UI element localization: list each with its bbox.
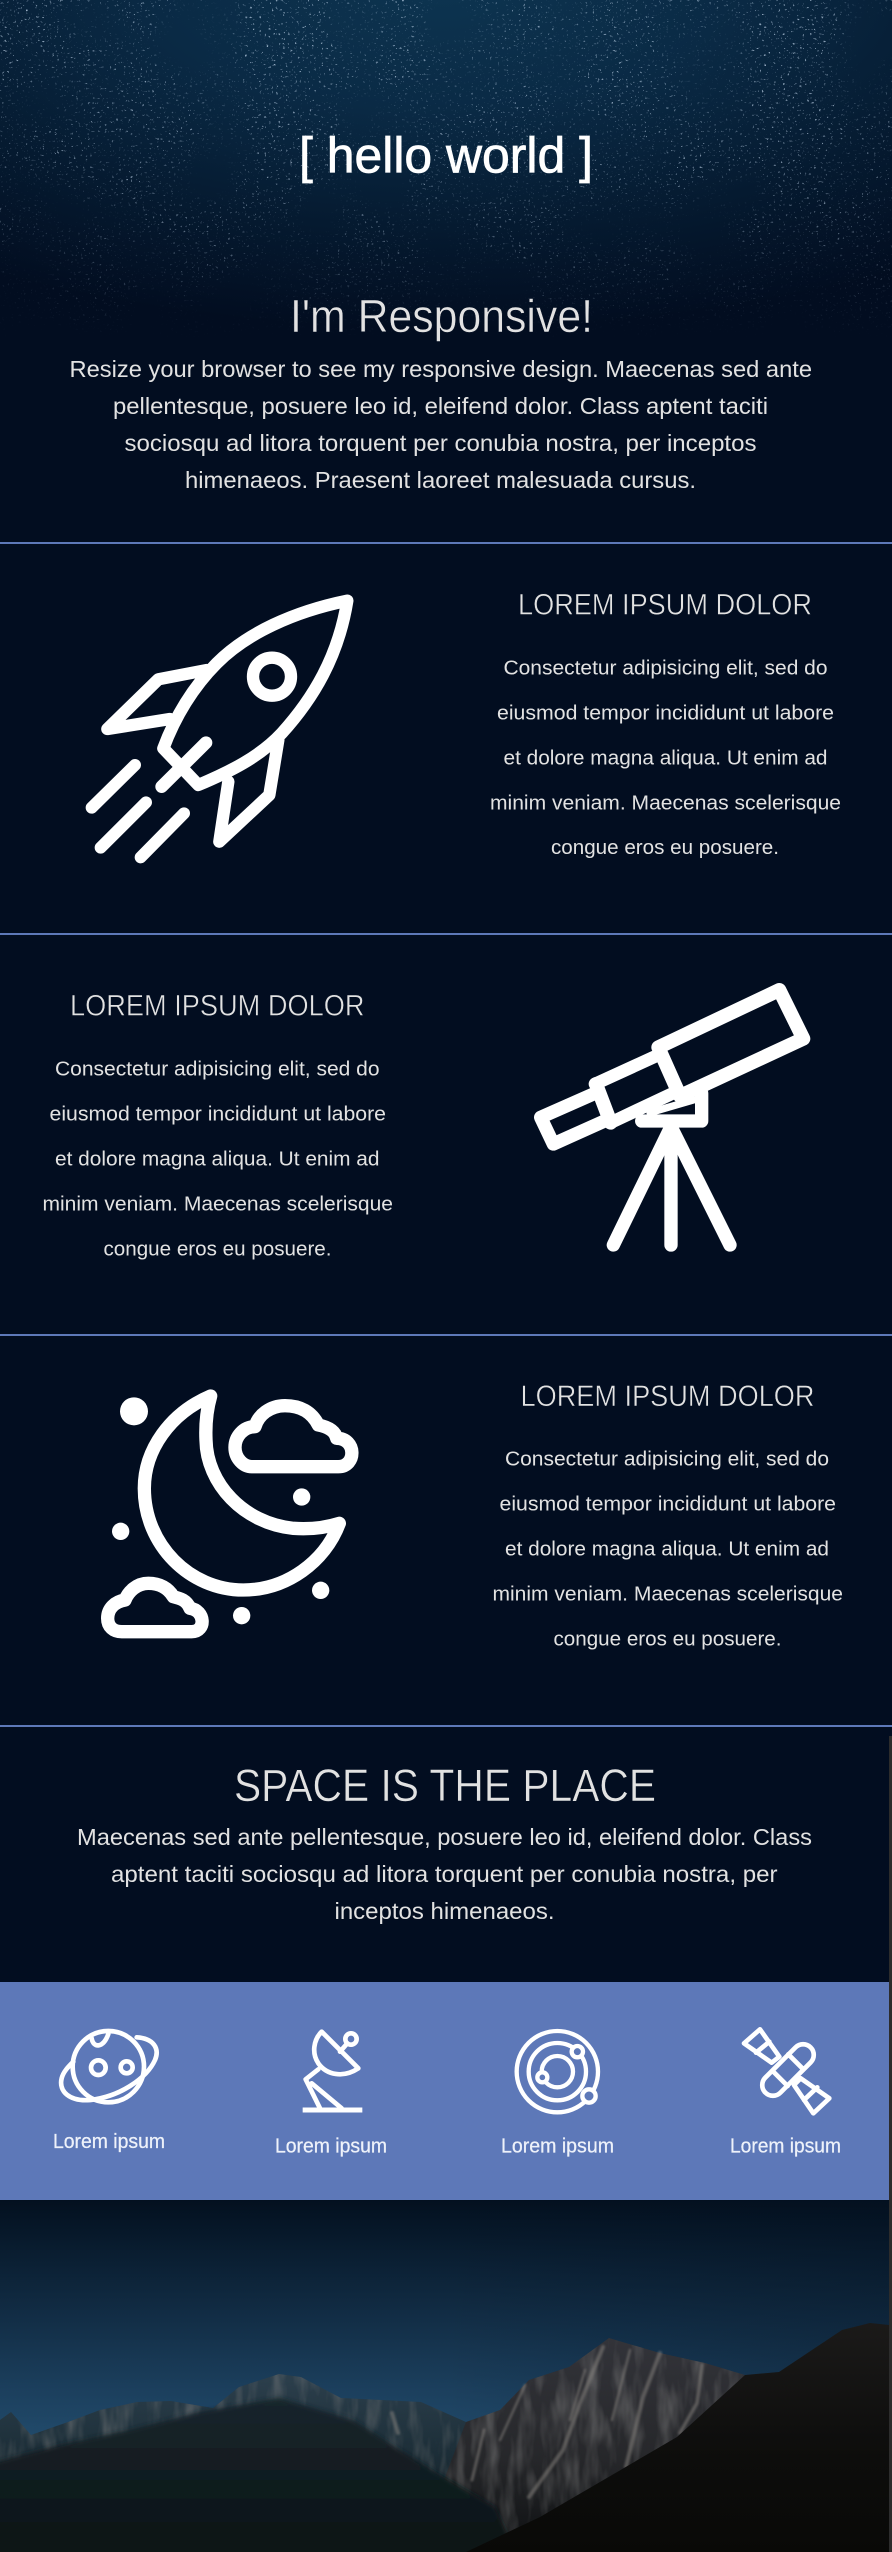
heading: LOREM IPSUM DOLOR (518, 588, 812, 622)
body text: et dolore magna aliqua. Ut enim ad (504, 748, 828, 770)
heading: LOREM IPSUM DOLOR (70, 990, 364, 1022)
icon: satellite (744, 2029, 829, 2113)
body text: eiusmod tempor incididunt ut labore (50, 1104, 386, 1126)
paragraph: Maecenas sed ante pellentesque, posuere leo id, eleifend dolor. Class (77, 1824, 812, 1850)
icon: moon and clouds (108, 1396, 352, 1632)
label: Lorem ipsum (730, 2136, 841, 2158)
body text: Consectetur adipisicing elit, sed do (505, 1448, 829, 1470)
divider lines (0, 542, 892, 1727)
heading: SPACE IS THE PLACE (234, 1760, 656, 1811)
panel: icon band (0, 1982, 889, 2200)
rock streaks (392, 2347, 702, 2497)
intro paragraph: pellentesque, posuere leo id, eleifend dolor. Class aptent taciti (113, 393, 768, 419)
far mountains (0, 2374, 500, 2552)
header star field (0, 0, 892, 340)
panel: space is the place (77, 1760, 812, 1924)
body text: et dolore magna aliqua. Ut enim ad (55, 1148, 380, 1170)
body text (490, 658, 841, 859)
body text: Consectetur adipisicing elit, sed do (504, 658, 828, 680)
intro block (70, 290, 812, 493)
icon: planet (61, 2031, 157, 2102)
intro paragraph (70, 356, 812, 493)
intro paragraph: himenaeos. Praesent laoreet malesuada cursus. (185, 467, 696, 493)
icon: rocket (92, 601, 347, 857)
icon: satellite dish (303, 2032, 362, 2110)
sunlit rock peak (440, 2338, 745, 2552)
intro paragraph: Resize your browser to see my responsive design. Maecenas sed ante (70, 356, 812, 382)
body text: Consectetur adipisicing elit, sed do (55, 1058, 380, 1080)
right dark mountain (466, 2323, 889, 2552)
body text: eiusmod tempor incididunt ut labore (500, 1494, 836, 1516)
label: Lorem ipsum (53, 2131, 165, 2153)
icon: solar system (517, 2031, 598, 2112)
paragraph: inceptos himenaeos. (334, 1898, 554, 1924)
panel: telescope section (42, 990, 803, 1260)
body text: minim veniam. Maecenas scelerisque (42, 1194, 393, 1216)
panel: rocket section (92, 588, 841, 859)
body text: congue eros eu posuere. (551, 837, 779, 859)
body text: congue eros eu posuere. (554, 1628, 782, 1650)
paragraph (77, 1824, 812, 1924)
paragraph: aptent taciti sociosqu ad litora torquent per conubia nostra, per (111, 1861, 778, 1887)
intro heading: I'm Responsive! (290, 290, 593, 342)
body text: eiusmod tempor incididunt ut labore (497, 702, 834, 724)
body text: et dolore magna aliqua. Ut enim ad (505, 1538, 829, 1560)
panel: moon section (108, 1380, 843, 1650)
heading: LOREM IPSUM DOLOR (520, 1380, 814, 1413)
label: Lorem ipsum (501, 2136, 614, 2158)
icon: telescope (541, 990, 803, 1245)
band background (0, 1982, 889, 2200)
label: Lorem ipsum (275, 2136, 387, 2158)
body text: minim veniam. Maecenas scelerisque (492, 1584, 843, 1606)
title: [ hello world ] (299, 128, 593, 184)
panel: mountain landscape (0, 2200, 889, 2552)
central dark mountain (0, 2398, 520, 2552)
intro paragraph: sociosqu ad litora torquent per conubia nostra, per inceptos (124, 430, 756, 456)
body text: congue eros eu posuere. (104, 1238, 332, 1260)
sky (0, 2200, 889, 2552)
body text: minim veniam. Maecenas scelerisque (490, 792, 841, 814)
page edge strip (889, 1736, 892, 2552)
body text (42, 1058, 393, 1260)
body text (492, 1448, 843, 1650)
